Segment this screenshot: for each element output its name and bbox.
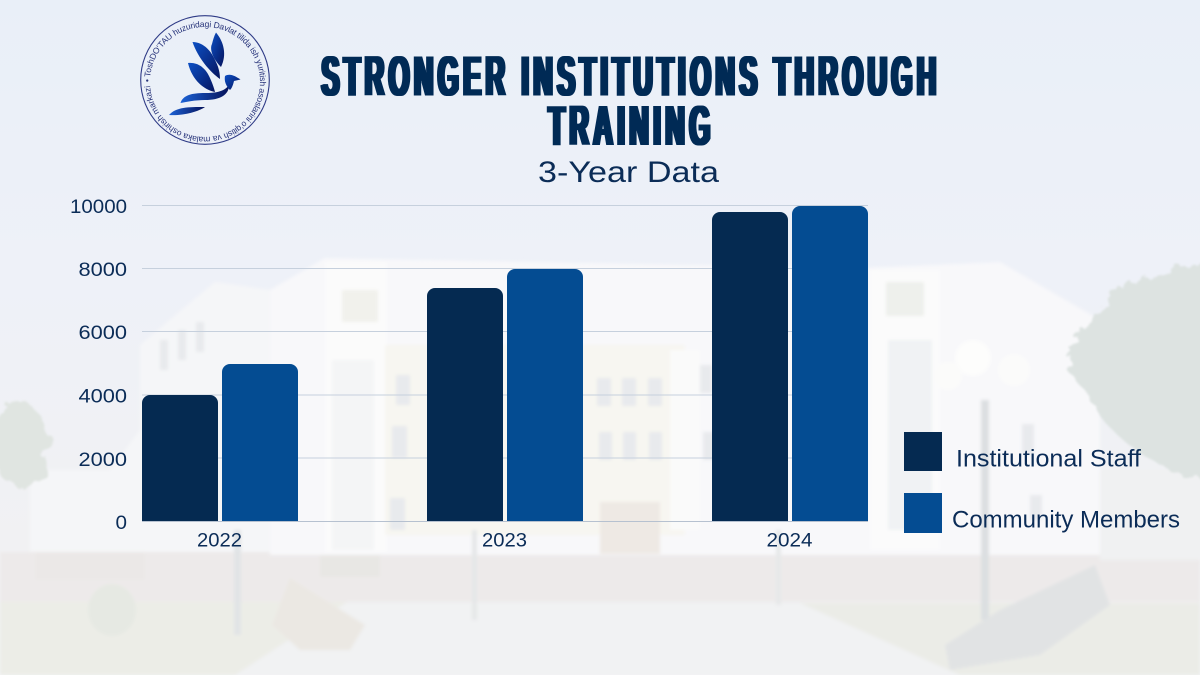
ground: [0, 595, 1200, 675]
legend: community members: Community Members: [952, 506, 1180, 534]
x axis labels: 2024: [766, 530, 813, 552]
terrace wall: [0, 552, 1200, 602]
y axis labels: 0: [116, 512, 127, 534]
legend: [904, 432, 1180, 534]
gridlines: [142, 206, 868, 522]
title: TRAINING: [548, 95, 710, 158]
lamp posts: [981, 400, 989, 620]
y axis labels: 8000: [78, 259, 127, 281]
y axis labels: 6000: [78, 322, 127, 344]
subtitle: 3-Year Data: [538, 156, 719, 189]
y axis labels: 2000: [78, 449, 127, 471]
bar chart: [70, 196, 868, 552]
y axis labels: 4000: [78, 386, 127, 408]
bird icon: [169, 32, 240, 115]
y axis labels: [70, 196, 127, 534]
main building: [270, 258, 1100, 555]
left wing of building: [30, 282, 270, 552]
bars 2024: [712, 206, 868, 521]
x axis labels: [197, 530, 813, 552]
seal ring text: • ToshDO‘TAU huzuridagi Davlat tilida ish yuritish asoslarini o‘qitish va malaka oshirish markazi: [144, 21, 266, 143]
benches: [272, 578, 365, 650]
bars 2022: [142, 364, 298, 521]
title: [322, 46, 936, 158]
x axis labels: 2023: [482, 530, 527, 552]
trees: [0, 262, 1200, 487]
legend: institutional staff: [904, 432, 1141, 472]
x axis labels: 2022: [197, 530, 242, 552]
y axis labels: 10000: [70, 196, 127, 218]
legend: institutional staff: Institutional Staff: [956, 446, 1141, 472]
legend: community members: [904, 493, 1180, 534]
title: STRONGER INSTITUTIONS THROUGH: [322, 46, 936, 108]
logo: circular seal with bird: [140, 15, 270, 145]
bars 2023: [427, 269, 583, 521]
windows: [160, 322, 1042, 530]
